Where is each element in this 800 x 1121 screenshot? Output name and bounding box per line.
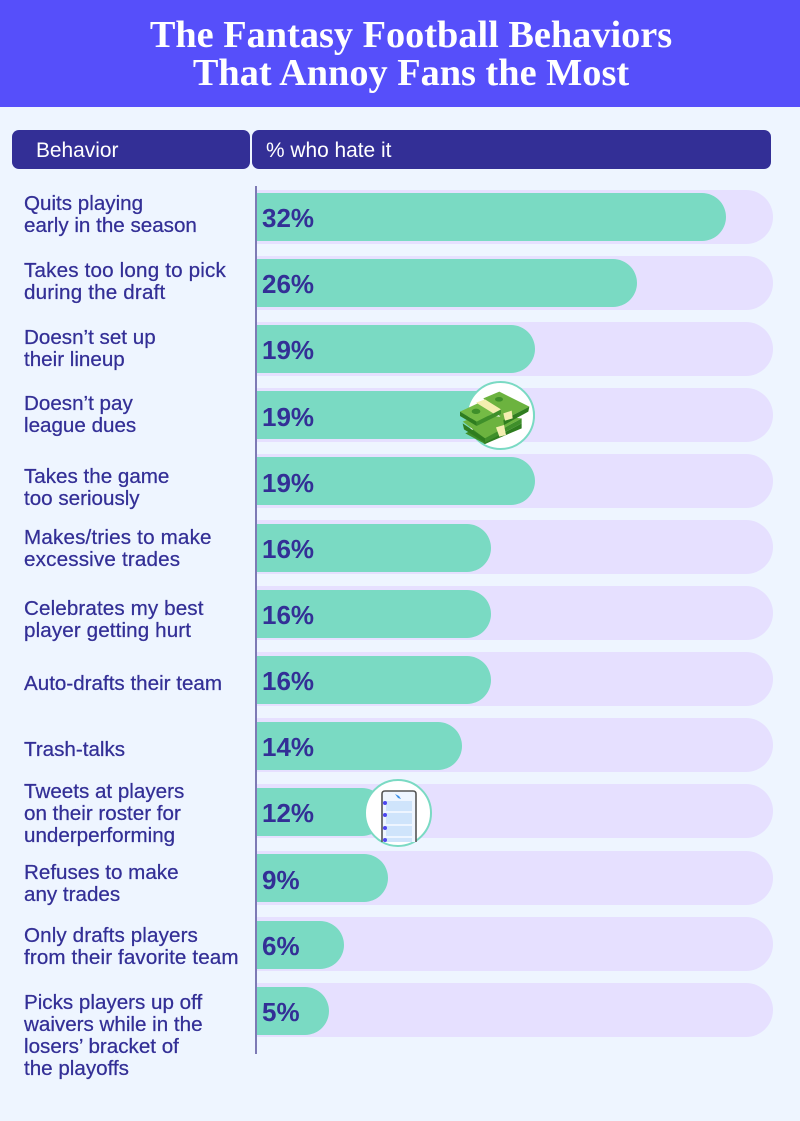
value: 14% (262, 732, 314, 762)
label: league dues (24, 414, 136, 437)
row: Takes the game (24, 454, 773, 510)
title (150, 14, 672, 94)
bar 26% (256, 259, 637, 307)
label: Auto-drafts their team (24, 672, 222, 695)
header: % who hate it: % who hate it (266, 139, 391, 162)
track (256, 454, 773, 508)
label: waivers while in the (24, 1013, 203, 1036)
value: 5% (262, 997, 300, 1027)
icon: cash bills (460, 392, 530, 444)
label: losers’ bracket of (24, 1035, 179, 1058)
label (24, 597, 204, 642)
label (24, 326, 156, 371)
title banner (0, 0, 800, 107)
label (24, 465, 169, 510)
label: Doesn’t set up (24, 326, 156, 349)
track (256, 718, 773, 772)
bar 19% (256, 325, 535, 373)
track (256, 784, 773, 838)
bar 6% (256, 921, 344, 969)
track (256, 652, 773, 706)
label (24, 991, 203, 1080)
bar 5% (256, 987, 329, 1035)
value: 6% (262, 931, 300, 961)
row: Refuses (24, 851, 773, 906)
label: Picks players up off (24, 991, 202, 1014)
label: their lineup (24, 348, 125, 371)
title: That Annoy Fans the Most (193, 52, 629, 94)
label: Tweets at players (24, 780, 184, 803)
bar 19% (256, 391, 535, 439)
row: Quits playing (24, 190, 773, 244)
chart axis line (255, 186, 257, 1054)
bar 12% (256, 788, 386, 836)
row: Doesn't pay (24, 388, 773, 442)
row: Takes too long (24, 256, 773, 310)
bar 16% (256, 590, 491, 638)
row: Celebrates (24, 586, 773, 642)
row: Auto-drafts (24, 652, 773, 706)
label: during the draft (24, 281, 165, 304)
row: Only drafts (24, 917, 773, 971)
bar 32% (256, 193, 726, 241)
label (24, 780, 184, 847)
label: on their roster for (24, 802, 181, 825)
label: too seriously (24, 487, 140, 510)
icon: cash circle (466, 381, 535, 450)
label: player getting hurt (24, 619, 191, 642)
value: 19% (262, 468, 314, 498)
value: 16% (262, 600, 314, 630)
value: 19% (262, 335, 314, 365)
value: 32% (262, 203, 314, 233)
label: Refuses to make (24, 861, 179, 884)
row: Trash-talks (24, 718, 773, 772)
value: 19% (262, 402, 314, 432)
bar 16% (256, 524, 491, 572)
row: Makes excessive trades (24, 520, 773, 574)
track (256, 322, 773, 376)
track (256, 586, 773, 640)
label: Takes the game (24, 465, 169, 488)
header: % who hate it (252, 130, 771, 169)
label: Quits playing (24, 192, 143, 215)
label: early in the season (24, 214, 197, 237)
header: Behavior (12, 130, 250, 169)
track (256, 520, 773, 574)
bar 14% (256, 722, 462, 770)
icon: phone list (381, 790, 417, 842)
bar 9% (256, 854, 388, 902)
track (256, 190, 773, 244)
label: Trash-talks (24, 738, 125, 761)
value: 16% (262, 666, 314, 696)
label (24, 259, 226, 304)
row: Doesn't set up (24, 322, 773, 376)
label (24, 526, 212, 571)
track (256, 388, 773, 442)
bar 19% (256, 457, 535, 505)
label: Only drafts players (24, 924, 198, 947)
track (256, 917, 773, 971)
label: underperforming (24, 824, 175, 847)
value: 12% (262, 798, 314, 828)
row: Picks players (24, 983, 773, 1080)
label (24, 861, 179, 906)
title: The Fantasy Football Behaviors (150, 14, 672, 56)
row: Tweets (24, 780, 773, 847)
track (256, 851, 773, 905)
track (256, 983, 773, 1037)
label: the playoffs (24, 1057, 129, 1080)
label (24, 392, 136, 437)
value: 9% (262, 865, 300, 895)
header: Behavior: Behavior (36, 139, 118, 162)
label (24, 924, 239, 969)
label: Makes/tries to make (24, 526, 212, 549)
value: 26% (262, 269, 314, 299)
label: from their favorite team (24, 946, 239, 969)
label: Takes too long to pick (24, 259, 226, 282)
value: 16% (262, 534, 314, 564)
label (24, 192, 197, 237)
label: Doesn’t pay (24, 392, 133, 415)
label: any trades (24, 883, 120, 906)
label: excessive trades (24, 548, 180, 571)
track (256, 256, 773, 310)
icon: phone circle (364, 779, 432, 847)
label: Celebrates my best (24, 597, 204, 620)
bar 16% (256, 656, 491, 704)
